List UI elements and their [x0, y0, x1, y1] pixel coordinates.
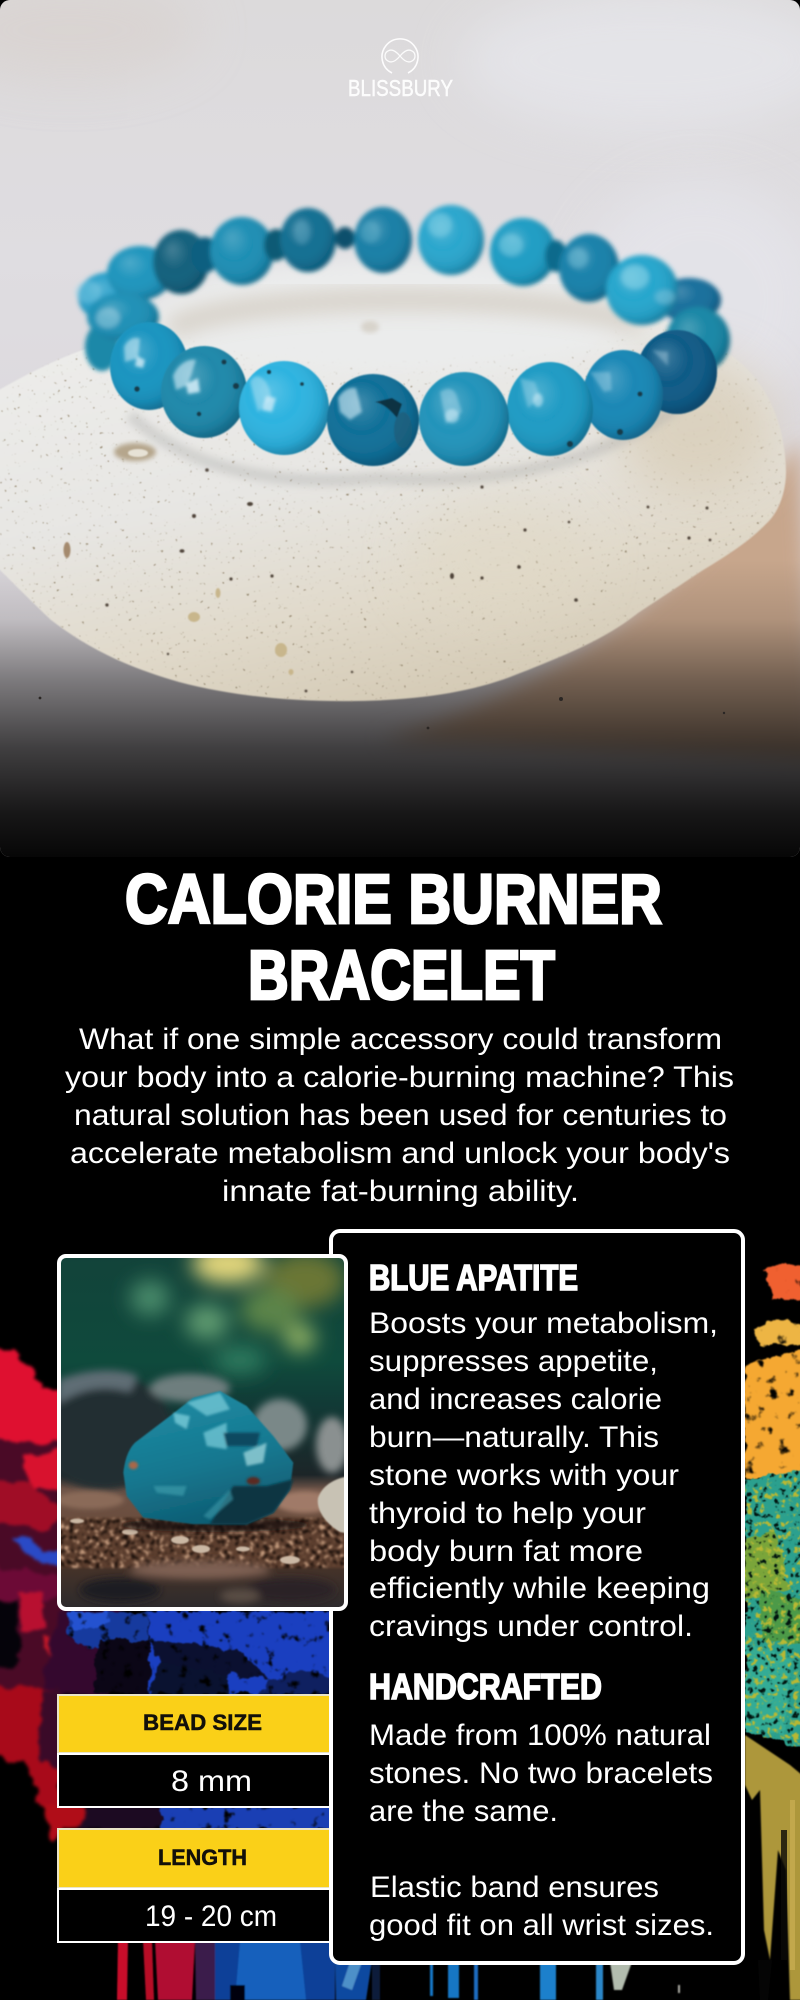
heading: handcrafted: HANDCRAFTED [369, 1666, 602, 1707]
blurred background stones [37, 1370, 348, 1490]
title: BRACELET [248, 936, 555, 1014]
hero photo: bracelet on a pebble [0, 0, 800, 857]
blue apatite description: burn—naturally. This [369, 1421, 659, 1454]
bottom dark fade [0, 560, 800, 857]
gravel ground [59, 1518, 346, 1568]
blue apatite description: efficiently while keeping [369, 1572, 710, 1605]
title [125, 860, 662, 1014]
heading: blue apatite: BLUE APATITE [369, 1257, 578, 1298]
bottom drips [117, 1940, 680, 2000]
title: CALORIE BURNER [125, 860, 662, 938]
handcrafted description: are the same. [369, 1795, 558, 1828]
value cell [58, 1754, 330, 1807]
handcrafted description: good fit on all wrist sizes. [369, 1909, 714, 1942]
text card [331, 1231, 743, 1963]
intro paragraph: your body into a calorie-burning machine? This [65, 1061, 734, 1094]
bracelet: blurred back beads [75, 205, 730, 373]
bokeh [130, 1244, 345, 1374]
logo: Blissbury: BLISSBURY [348, 75, 453, 101]
label cell: LENGTH [158, 1845, 247, 1870]
bead highlights [124, 338, 668, 424]
intro paragraph: accelerate metabolism and unlock your body's [70, 1137, 730, 1170]
handcrafted description: Elastic band ensures [370, 1871, 659, 1904]
spec table: length [58, 1829, 330, 1942]
spec table: bead size [58, 1695, 330, 1807]
paint splash: orange, green and gold, right [745, 1264, 800, 2000]
value cell [58, 1889, 330, 1942]
logo: Blissbury [348, 39, 453, 101]
blue apatite description [369, 1307, 718, 1643]
bead specks [134, 360, 642, 447]
blue apatite description: cravings under control. [369, 1610, 693, 1643]
small pale pebble [317, 1476, 344, 1534]
intro paragraph: natural solution has been used for centuries to [74, 1099, 727, 1132]
value cell: 19 - 20 cm [145, 1900, 277, 1933]
bracelet shadow on the pebble [170, 299, 640, 330]
blue apatite rock [123, 1391, 293, 1524]
bracelet: sharp front beads [110, 322, 717, 466]
value cell: 8 mm [171, 1765, 252, 1798]
blue apatite description: thyroid to help your [369, 1497, 646, 1530]
intro paragraph: innate fat-burning ability. [222, 1175, 579, 1208]
handcrafted description [369, 1719, 714, 1942]
label cell [58, 1829, 330, 1888]
pebble [0, 257, 786, 701]
blue apatite description: Boosts your metabolism, [369, 1307, 718, 1340]
handcrafted description: Made from 100% natural [369, 1719, 711, 1752]
handcrafted description: stones. No two bracelets [369, 1757, 713, 1790]
paint splash: red and blue, left and bottom [0, 1347, 680, 2000]
photo card: raw blue apatite stone [37, 1244, 350, 1609]
label cell: BEAD SIZE [143, 1710, 262, 1735]
blue apatite description: and increases calorie [369, 1383, 662, 1416]
intro paragraph: What if one simple accessory could transform [79, 1023, 722, 1056]
blue apatite description: body burn fat more [369, 1535, 643, 1568]
label cell [58, 1695, 330, 1753]
blue apatite description: suppresses appetite, [369, 1345, 658, 1378]
blue apatite description: stone works with your [369, 1459, 679, 1492]
specks on the table [39, 697, 725, 729]
intro paragraph [65, 1023, 734, 1208]
